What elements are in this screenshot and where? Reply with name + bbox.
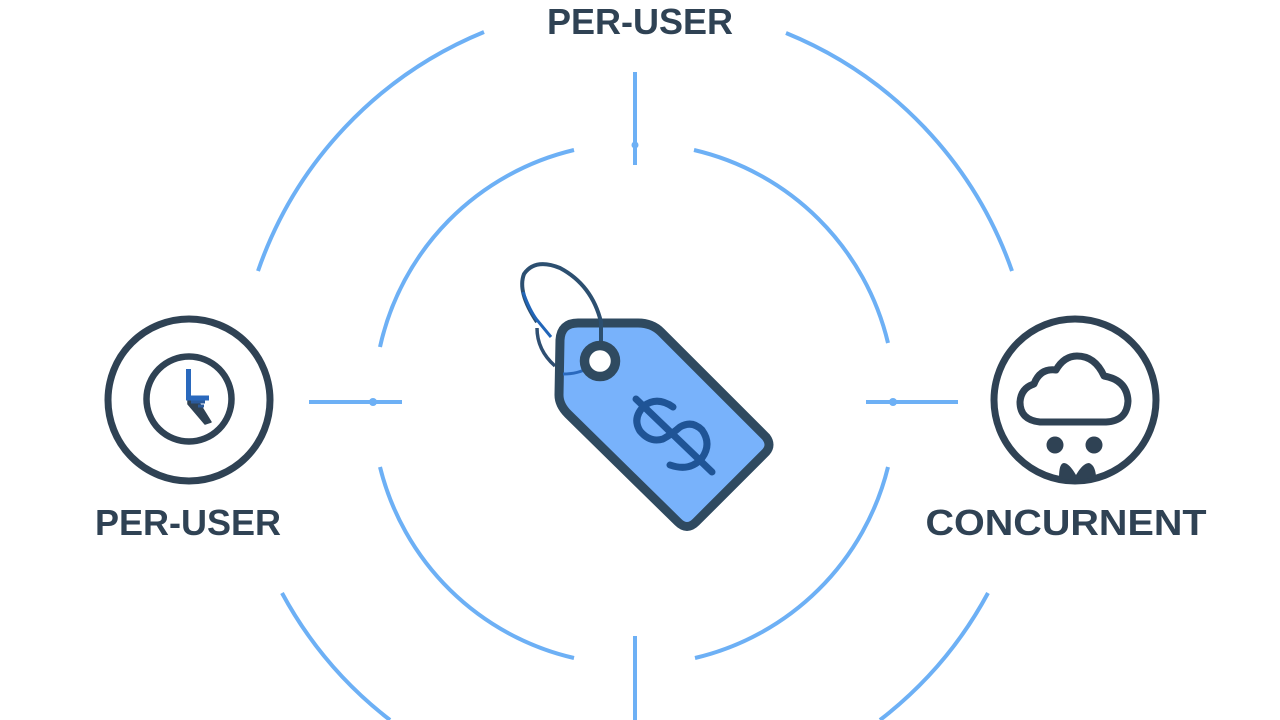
label: concurrent: CONCURNENT (926, 502, 1206, 543)
inner ring arcs (380, 150, 888, 658)
tag body (559, 323, 769, 526)
tag string back (537, 328, 555, 366)
icon: price tag with dollar sign (522, 264, 769, 526)
dollar sign (636, 399, 712, 472)
tag string loop (522, 264, 601, 345)
outer ring arcs (258, 32, 1012, 720)
icon: clock with per-user label (95, 319, 281, 543)
tag hole (584, 346, 616, 376)
icon: cloud with concurrent label (926, 319, 1206, 543)
connector ticks (309, 72, 958, 720)
label: per-user: PER-USER (95, 502, 281, 543)
heading: top per-user label: PER-USER (547, 1, 733, 42)
